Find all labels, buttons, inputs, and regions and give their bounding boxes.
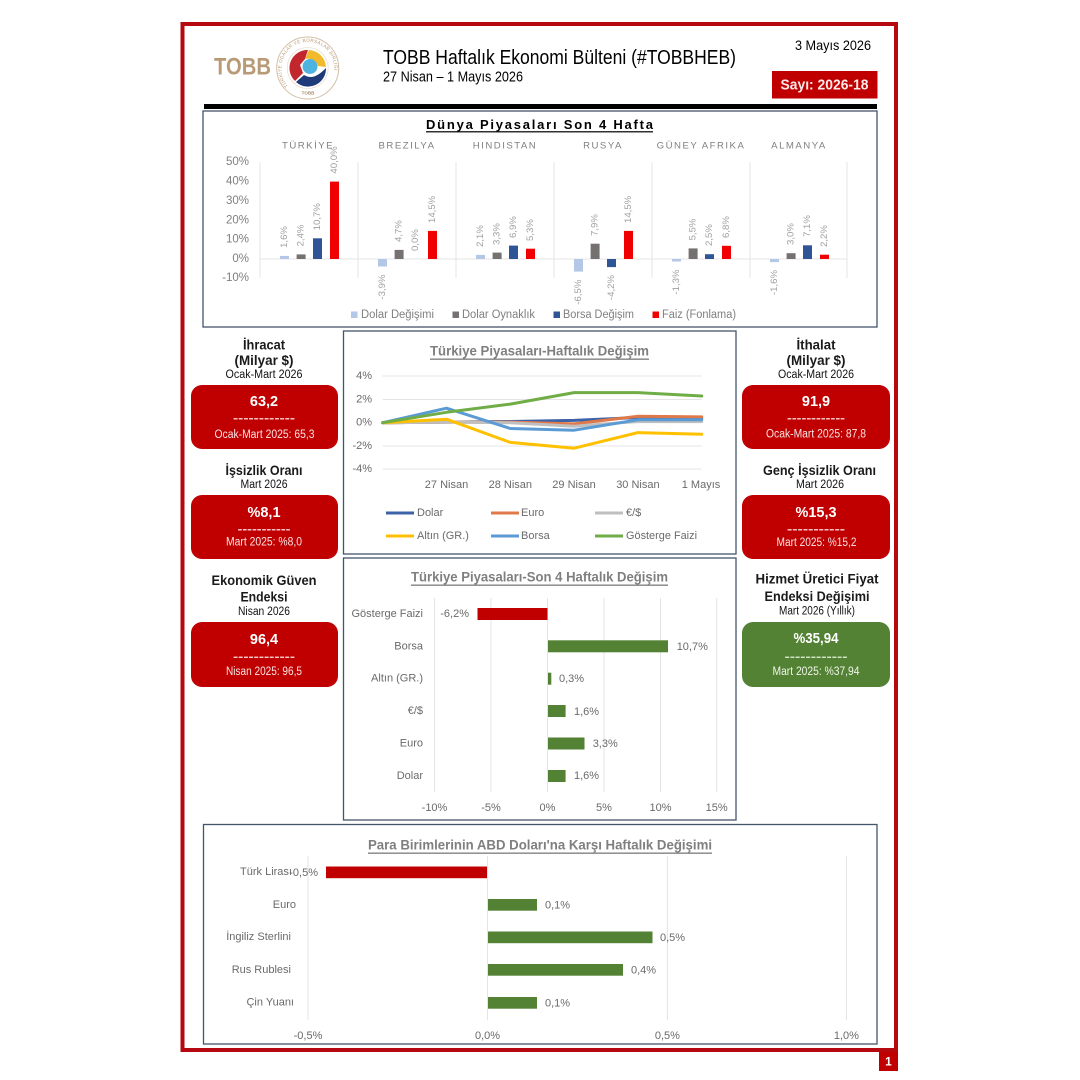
KPI: ekonomik güven endeksi: 96,4 [250,632,278,648]
issue date: 3 Mayıs 2026 [795,37,871,53]
bar chart: Brezilya [377,195,438,300]
KPI: ekonomik güven endeksi: Ekonomik Güven [212,573,316,588]
bar chart: Almanya: 2,2% [819,225,830,247]
currency chart grid and axis: 0,5% [655,1030,680,1042]
y axis: 20% [226,214,249,226]
KPI: ihracat: İhracat [243,338,285,352]
KPI: ekonomik güven endeksi: Endeksi [240,590,288,604]
bar chart: Rusya [573,195,634,305]
category labels: 4-week change: Gösterge Faizi [351,608,423,620]
panel: world markets [203,111,877,327]
line chart legend: Gösterge Faizi [626,530,697,542]
KPI: hizmet üretici fiyat endeksi: ------------ [784,652,848,664]
page number [879,1052,898,1071]
KPI: ekonomik güven endeksi: ------------ [233,652,295,664]
legend: world markets: Dolar Değişimi [361,309,434,321]
logo: TOBB [214,36,340,100]
KPI: ihracat [191,338,338,449]
bar chart grid and axis: -5% [481,802,501,814]
country names: GÜNEY AFRIKA [657,140,745,152]
KPI: ithalat: Ocak-Mart 2026 [778,369,854,381]
y axis: 30% [226,195,249,207]
line chart axes: 2% [356,394,372,406]
bar chart: Türkiye: 40,0% [329,146,340,174]
KPI: hizmet üretici fiyat endeksi: Mart 2026 (Yıllık) [779,606,855,618]
KPI: ithalat: 91,9 [802,394,830,410]
line chart legend: Borsa [521,530,551,542]
bar chart: Türkiye: 1,6% [279,226,290,248]
page frame [182,24,896,1050]
value labels: 4-week change: 10,7% [677,641,708,653]
bars: 4-week change [478,608,668,782]
bar chart: Rusya: 14,5% [623,195,634,223]
logo: TOBB: TOBB [302,90,315,96]
page number: 1 [885,1054,892,1068]
legend: world markets: Dolar Oynaklık [462,309,535,321]
bar chart grid and axis: -10% [422,802,448,814]
line chart axes: 28 Nisan [489,479,532,491]
currency chart grid and axis [294,856,859,1042]
currency chart grid and axis: -0,5% [294,1030,323,1042]
KPI: genç işsizlik oranı: %15,3 [795,505,837,521]
KPI: işsizlik oranı: Mart 2026 [240,479,288,491]
KPI: ithalat: Ocak-Mart 2025: 87,8 [766,428,866,440]
legend: world markets: Borsa Değişim [563,309,634,321]
KPI: işsizlik oranı: İşsizlik Oranı [226,463,302,478]
y axis: -10% [222,272,249,284]
category labels: 4-week change: Altın (GR.) [371,672,423,684]
value labels: currencies: 0,5% [660,932,685,944]
KPI: ihracat: (Milyar $) [234,353,294,368]
bar chart: Türkiye: 2,4% [296,224,307,246]
KPI: işsizlik oranı: %8,1 [247,505,281,521]
category labels: currencies [226,866,296,1008]
bar chart grid and axis [422,598,728,814]
line chart legend [386,507,697,542]
KPI: işsizlik oranı [191,463,338,559]
bar chart: Güney Afrika: 6,8% [721,216,732,238]
line chart legend: Altın (GR.) [417,530,469,542]
value labels: 4-week change: 0,3% [559,673,584,685]
bar chart grid and axis: 15% [706,802,728,814]
country names: ALMANYA [771,140,827,152]
bar chart: Türkiye [279,146,340,259]
logo: TOBB: TOBB [214,54,271,80]
panel: 4-week change bar chart [344,558,736,820]
line chart legend: Dolar [417,507,444,519]
country names [282,140,827,152]
bar chart: Türkiye: 10,7% [312,203,323,230]
bar chart: Almanya: -1,6% [769,270,780,295]
bar chart: Hindistan [475,216,536,259]
bar chart: Brezilya: -3,9% [377,274,388,300]
heading: 4-week change: Türkiye Piyasaları-Son 4 Haftalık Değişim [411,570,668,584]
line chart axes: -4% [352,463,372,475]
line chart axes: 30 Nisan [616,479,660,491]
value labels: 4-week change: -6,2% [440,608,469,620]
KPI: işsizlik oranı: ----------- [238,524,291,536]
category labels: currencies: Çin Yuanı [246,996,294,1008]
KPI: hizmet üretici fiyat endeksi: Mart 2025: %37,94 [772,666,860,678]
line chart axes: 4% [356,370,372,382]
category labels: 4-week change: Borsa [394,640,424,652]
line chart axes: 27 Nisan [425,479,468,491]
bar chart: Hindistan: 2,1% [475,225,486,247]
category labels: currencies: Rus Rublesi [232,964,291,976]
bar chart: Güney Afrika [671,216,732,295]
value labels: 4-week change [440,608,708,782]
category labels: 4-week change [351,608,424,782]
KPI: hizmet üretici fiyat endeksi: Endeksi Değişimi [764,589,870,604]
bar chart grid and axis: 5% [596,802,612,814]
currency chart grid and axis: 1,0% [834,1030,859,1042]
currency chart grid and axis: 0,0% [475,1030,500,1042]
bar chart: Brezilya: 0,0% [410,229,421,251]
bar chart: Rusya: 7,9% [590,214,601,236]
country names: HINDISTAN [473,140,537,152]
KPI: ihracat: Ocak-Mart 2025: 65,3 [214,429,314,441]
bar chart: Hindistan: 3,3% [492,223,503,245]
KPI: genç işsizlik oranı: Mart 2026 [796,479,844,491]
category labels: 4-week change: €/$ [408,705,423,717]
category labels: 4-week change: Euro [400,738,423,750]
country names: BREZILYA [379,140,435,152]
value labels: currencies: 0,1% [545,900,570,912]
category labels: currencies: Euro [273,899,296,911]
bar chart: Almanya: 7,1% [802,215,813,237]
bar chart: Güney Afrika: 2,5% [704,224,715,246]
KPI: genç işsizlik oranı: ----------- [787,524,845,536]
KPI: ihracat: 63,2 [250,394,278,410]
value labels: currencies: 0,1% [545,998,570,1010]
KPI: hizmet üretici fiyat endeksi: Hizmet Üretici Fiyat [756,572,879,586]
heading: weekly change: Türkiye Piyasaları-Haftalık Değişim [430,344,649,358]
category labels: currencies: İngiliz Sterlini [226,930,291,943]
KPI: genç işsizlik oranı: Genç İşsizlik Oranı [763,463,876,478]
KPI: genç işsizlik oranı: Mart 2025: %15,2 [776,537,856,549]
line chart axes: 1 Mayıs [682,479,721,491]
KPI: ithalat [742,338,890,449]
KPI: ekonomik güven endeksi [191,573,338,687]
KPI: hizmet üretici fiyat endeksi [742,572,890,687]
panel: currencies against USD [204,824,877,1044]
KPI: ithalat: (Milyar $) [786,353,846,368]
bar chart: Güney Afrika: -1,3% [671,269,682,295]
KPI: ithalat: ------------ [787,413,845,425]
date range: 27 Nisan – 1 Mayıs 2026 [383,68,523,86]
y axis: 10% [226,234,249,246]
value labels: currencies [289,867,685,1010]
line chart series [383,393,702,448]
KPI: genç işsizlik oranı [742,463,890,559]
category labels: currencies: Türk Lirası [240,866,292,878]
y axis: 0% [232,253,249,265]
bar chart grid and axis: 10% [649,802,672,814]
bar chart: Almanya [769,215,830,295]
panel: weekly change line chart [344,331,736,554]
line chart legend: €/$ [626,507,641,519]
bar chart: Rusya: -4,2% [606,275,617,300]
value labels: currencies: -0,5% [289,867,318,879]
category labels: 4-week change: Dolar [397,770,423,782]
bar chart: Güney Afrika: 5,5% [688,218,699,240]
KPI: ekonomik güven endeksi: Nisan 2025: 96,5 [226,666,302,678]
bars: currencies [326,866,652,1009]
KPI: ekonomik güven endeksi: Nisan 2026 [238,606,290,618]
country names: RUSYA [583,140,623,152]
y axis: 40% [226,176,249,188]
KPI: ithalat: İthalat [796,338,836,352]
y axis: 50% [226,156,249,168]
bar chart: Brezilya: 4,7% [394,220,405,242]
line chart axes: 0% [356,417,372,429]
bar chart: Rusya: -6,5% [573,279,584,305]
value labels: 4-week change: 3,3% [593,738,618,750]
bar chart: Brezilya: 14,5% [427,195,438,223]
KPI: hizmet üretici fiyat endeksi: %35,94 [794,631,838,647]
legend: world markets [351,309,736,321]
line chart axes: -2% [352,440,372,452]
bulletin title: TOBB Haftalık Ekonomi Bülteni (#TOBBHEB) [383,47,736,69]
heading: currencies: Para Birimlerinin ABD Doları'na Karşı Haftalık Değişimi [368,838,712,852]
header [214,36,878,100]
KPI: ihracat: Ocak-Mart 2026 [226,369,302,381]
y axis [222,156,847,284]
heading: world markets: Dünya Piyasaları Son 4 Hafta [426,117,654,132]
bar chart: Hindistan: 5,3% [525,219,536,241]
issue number badge [772,71,878,98]
country names: TÜRKİYE [282,140,334,152]
value labels: currencies: 0,4% [631,964,656,976]
KPI: ihracat: ------------ [233,413,295,425]
issue number badge: Sayı: 2026-18 [780,76,868,94]
logo: TOBB: TÜRKİYE ODALAR VE BORSALAR BİRLİĞİ [278,38,338,88]
bar chart: Hindistan: 6,9% [508,216,519,238]
KPI: işsizlik oranı: Mart 2025: %8,0 [226,537,302,549]
legend: world markets: Faiz (Fonlama) [662,309,736,321]
line chart axes [352,370,721,491]
value labels: 4-week change: 1,6% [574,706,599,718]
value labels: 4-week change: 1,6% [574,770,599,782]
line chart legend: Euro [521,507,544,519]
bar chart: Almanya: 3,0% [786,223,797,245]
bar chart grid and axis: 0% [540,802,556,814]
line chart axes: 29 Nisan [552,479,596,491]
